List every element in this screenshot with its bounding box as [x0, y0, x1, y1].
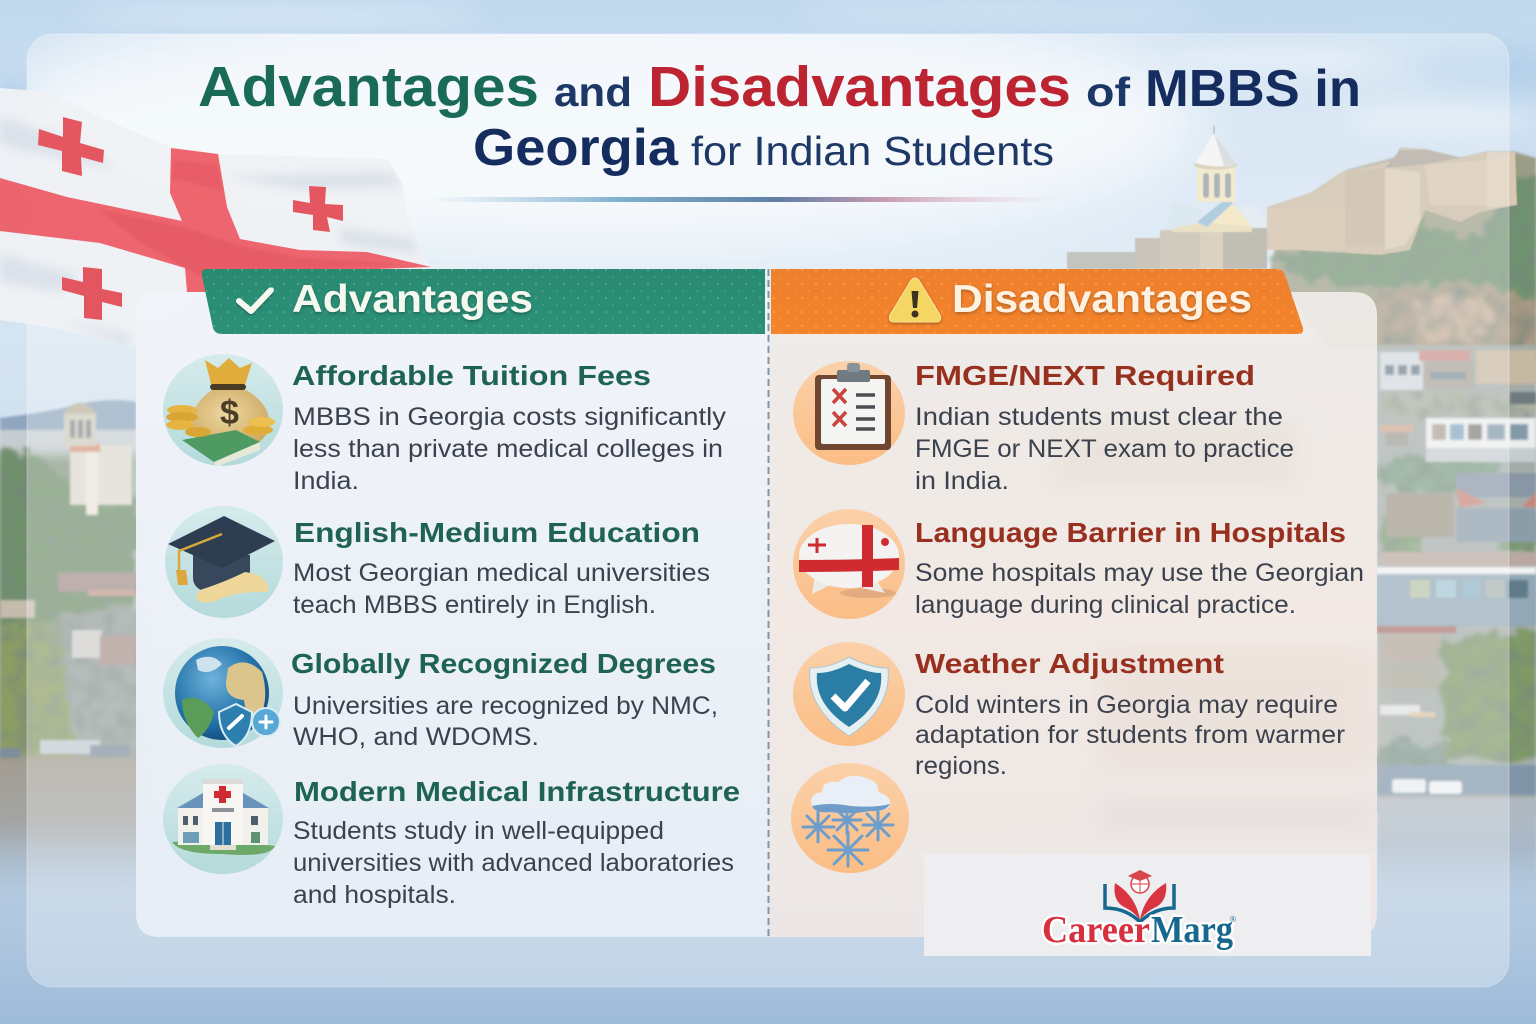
description: less than private medical colleges in [293, 435, 723, 463]
title: MBBS in [1145, 60, 1361, 118]
flag of Georgia [0, 88, 431, 348]
item: weather adjustment [791, 642, 1345, 873]
heading: Affordable Tuition Fees [292, 360, 651, 391]
title: Advantages [198, 55, 539, 119]
logo wordmark: Career [1042, 909, 1150, 951]
heading: Language Barrier in Hospitals [915, 517, 1346, 548]
heading: FMGE/NEXT Required [915, 360, 1255, 391]
title: Georgia [473, 119, 679, 177]
description: in India. [915, 467, 1009, 495]
description: regions. [915, 752, 1007, 780]
heading: Modern Medical Infrastructure [294, 776, 740, 807]
icon: check mark [239, 290, 271, 311]
item: FMGE/NEXT required [793, 360, 1294, 495]
title: of [1086, 69, 1130, 115]
icon: snow cloud [791, 763, 909, 873]
description: teach MBBS entirely in English. [293, 591, 656, 619]
description: India. [293, 467, 359, 495]
description [915, 403, 1294, 495]
description: Most Georgian medical universities [293, 559, 710, 587]
background: left city and trees [0, 400, 146, 895]
description: FMGE or NEXT exam to practice [915, 435, 1294, 463]
title: Disadvantages [648, 55, 1071, 119]
title: for Indian Students [691, 128, 1054, 174]
icon: money bag [163, 354, 283, 467]
title: and [554, 69, 632, 115]
description: Some hospitals may use the Georgian [915, 559, 1364, 587]
description: Universities are recognized by NMC, [293, 692, 718, 720]
icon: shield with check [793, 642, 905, 746]
item: modern medical infrastructure [163, 764, 740, 909]
icon: clipboard [793, 361, 905, 465]
content panel [136, 292, 1377, 937]
background: right city, trees and cars [1350, 345, 1536, 898]
icon: money bag: $ [220, 394, 239, 432]
center dashed divider [768, 269, 770, 937]
item: globally recognized degrees [163, 638, 718, 751]
heading: Advantages: Advantages [292, 278, 533, 321]
icon: warning triangle [890, 278, 940, 322]
description [293, 692, 718, 751]
description [293, 403, 727, 495]
heading: Globally Recognized Degrees [291, 648, 716, 679]
panel scene: faint city inside disadvantages panel [1050, 420, 1377, 830]
panel: disadvantages background [768, 292, 1377, 937]
description: Cold winters in Georgia may require [915, 691, 1338, 719]
icon: speech bubble with Georgian flag [793, 509, 905, 619]
description: universities with advanced laboratories [293, 849, 734, 877]
icon: graduation cap [165, 506, 283, 618]
background: hill, castle and church [1067, 126, 1536, 352]
description: Students study in well-equipped [293, 817, 664, 845]
description: and hospitals. [293, 881, 456, 909]
description: language during clinical practice. [915, 591, 1296, 619]
icon: hospital building [163, 764, 283, 874]
item: affordable tuition fees [163, 354, 727, 495]
banner: advantages [202, 269, 765, 334]
logo: CareerMarg: ® [1230, 915, 1236, 924]
description: Indian students must clear the [915, 403, 1283, 431]
item: english-medium education [165, 506, 710, 619]
heading: Disadvantages: Disadvantages [952, 278, 1252, 321]
description [293, 559, 710, 619]
description [915, 559, 1364, 619]
heading: English-Medium Education [294, 517, 700, 548]
title glow [27, 34, 1204, 260]
description: adaptation for students from warmer [915, 721, 1345, 749]
logo: CareerMarg [924, 854, 1371, 956]
description: MBBS in Georgia costs significantly [293, 403, 727, 431]
logo: CareerMarg: Marg [1151, 909, 1233, 951]
logo background box [924, 854, 1371, 956]
title [198, 55, 1361, 177]
banner: disadvantages [771, 269, 1303, 334]
description [915, 691, 1345, 780]
item: language barrier in hospitals [793, 509, 1364, 619]
panel: advantages background [136, 292, 768, 937]
description: WHO, and WDOMS. [293, 723, 539, 751]
icon: globe with shields [163, 638, 283, 748]
icon: open book with globe cap [1105, 870, 1174, 922]
description [293, 817, 734, 909]
title underline [430, 197, 1060, 202]
heading: Weather Adjustment [915, 648, 1224, 679]
